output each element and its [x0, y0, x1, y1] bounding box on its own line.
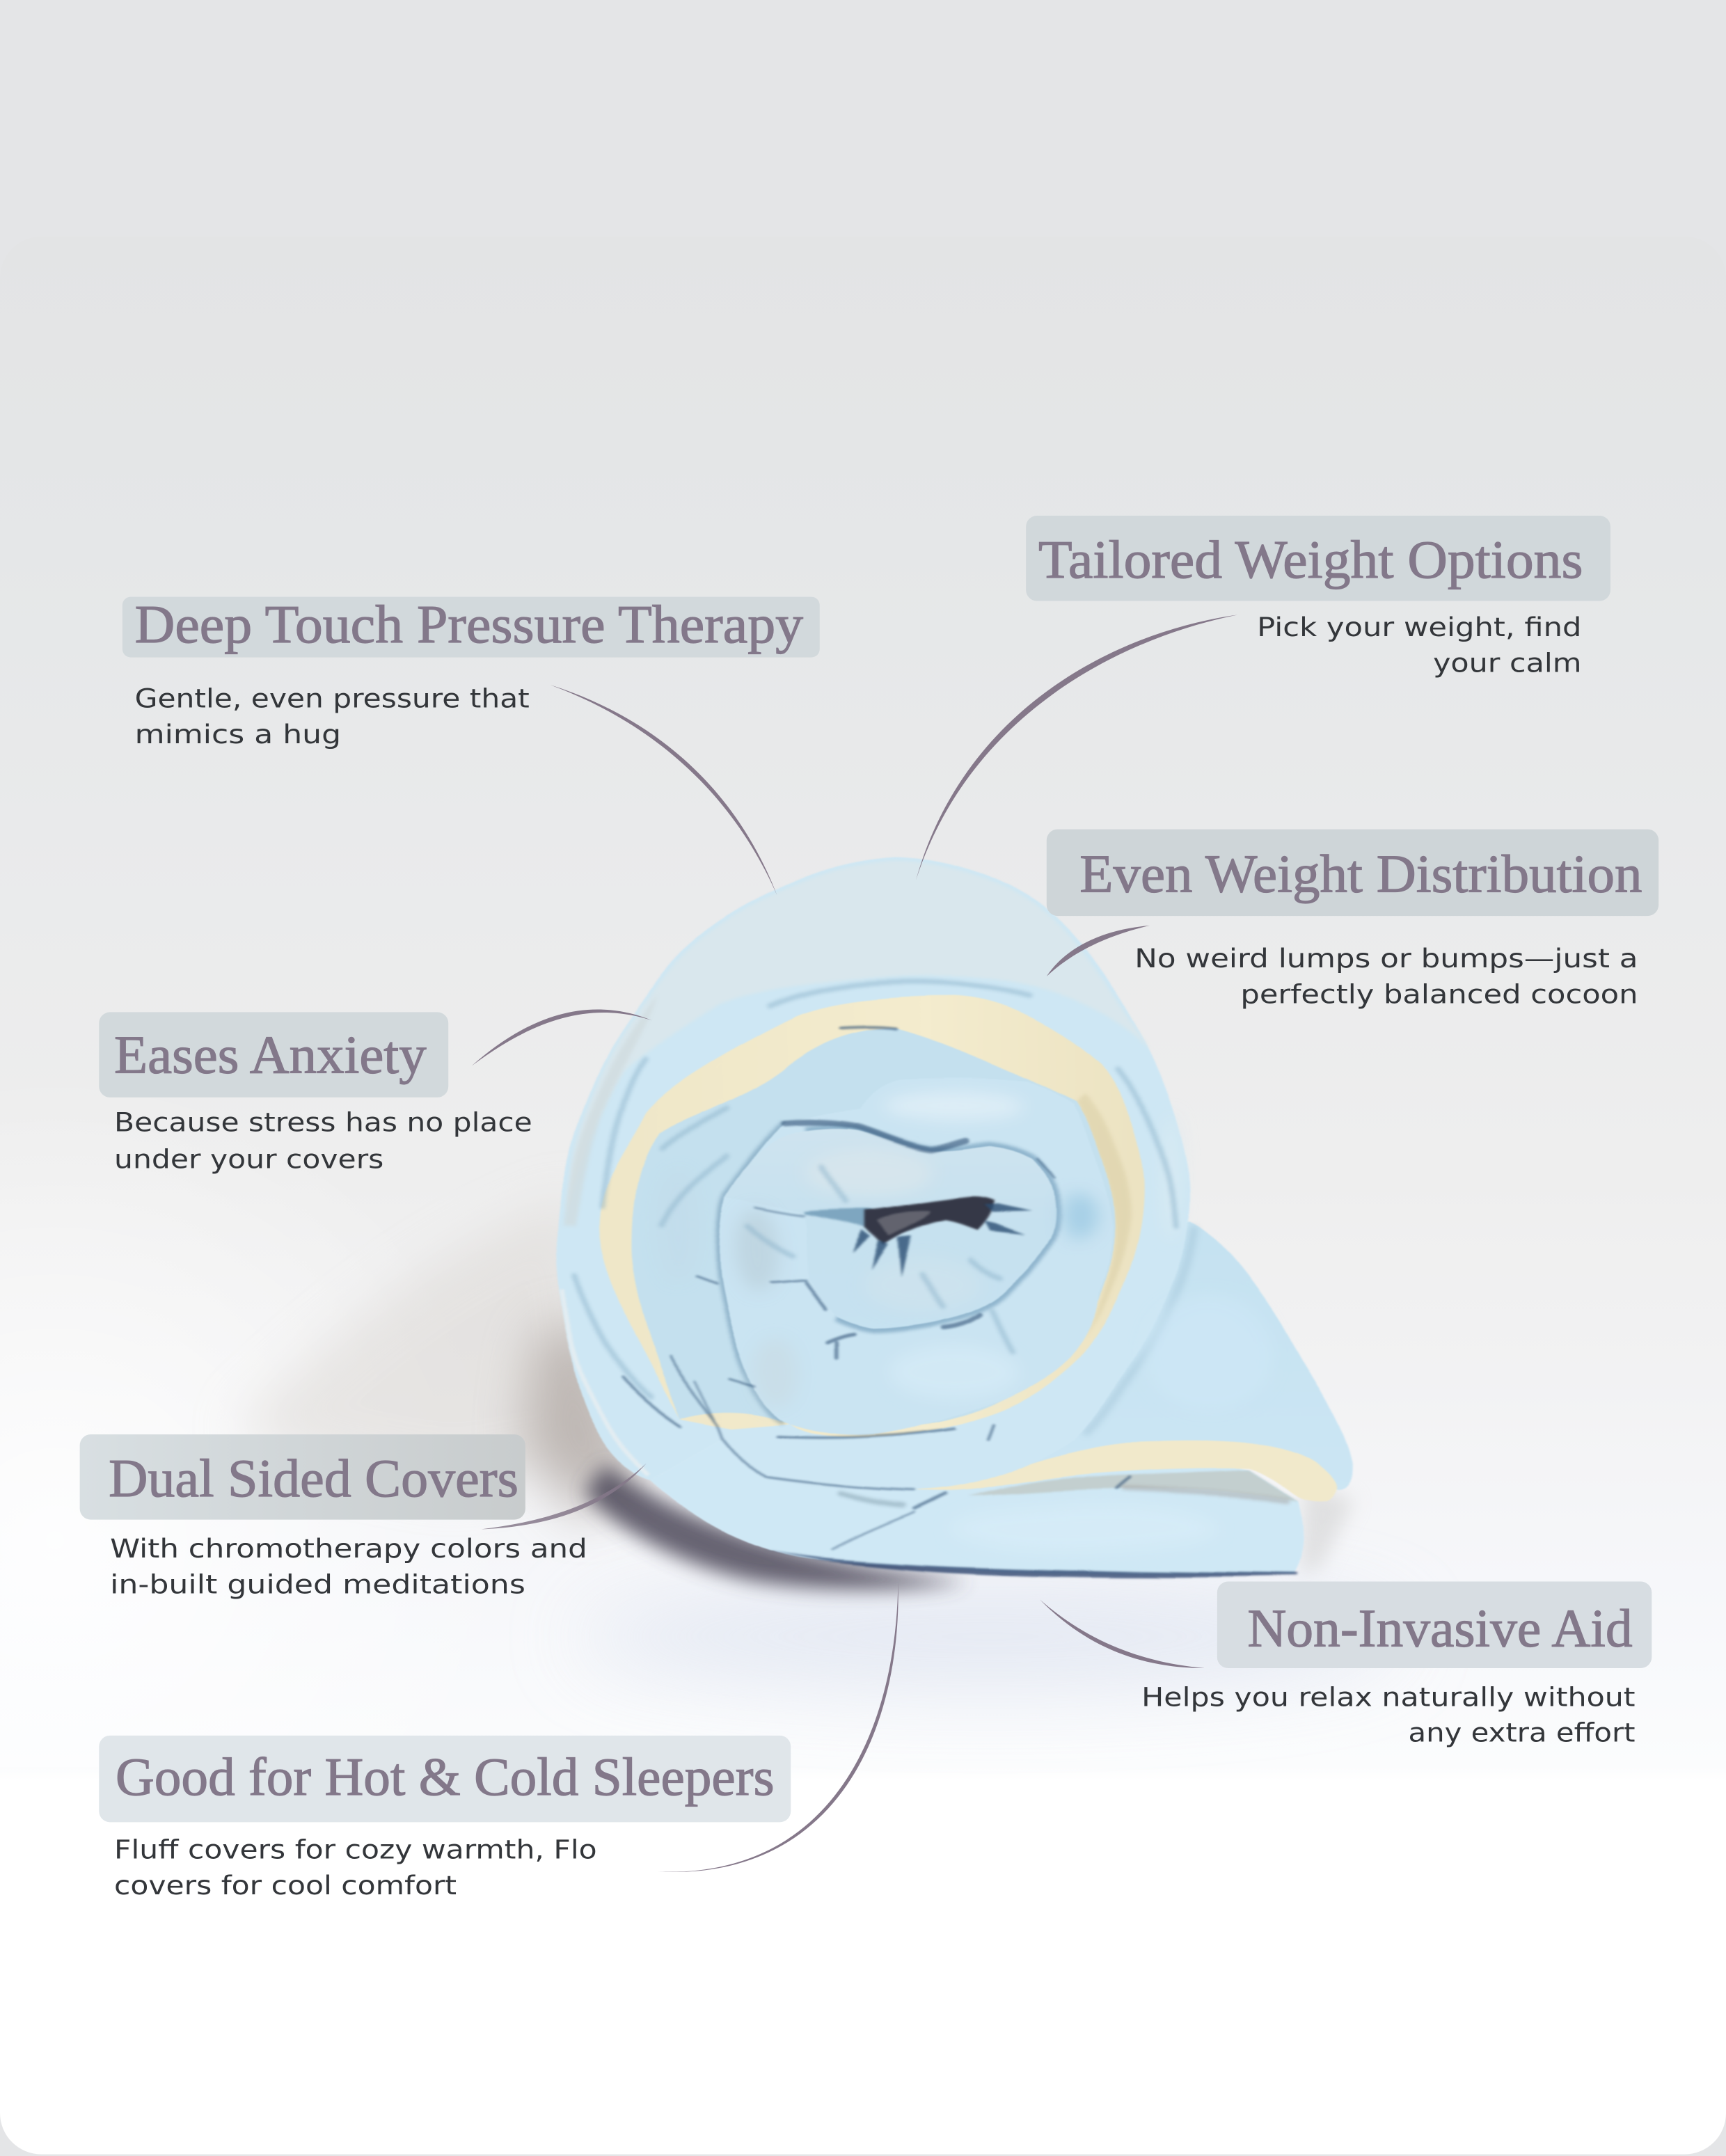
callout: Even Weight Distribution [1047, 830, 1658, 1010]
cream lining under flap [915, 1440, 1337, 1501]
blanket flap [976, 1221, 1353, 1490]
grey underside strip [969, 1470, 1299, 1501]
shadow around inner coil [805, 1129, 1055, 1329]
heading: Dual Sided Covers [80, 1434, 525, 1520]
text: Tailored Weight Options description [1257, 612, 1582, 678]
blanket shadows [0, 1072, 1403, 1767]
blanket roll outer wrap [556, 857, 1191, 1491]
text: Dual Sided Covers description: With chromotherapy colors and [110, 1533, 587, 1564]
centre hole shade [805, 1209, 873, 1228]
bottom edge of blanket [759, 1548, 1297, 1578]
inner coil [725, 1129, 1055, 1329]
shadow of second coil [720, 1123, 784, 1422]
bottom layer of blanket [649, 1438, 1304, 1575]
callout: Tailored Weight Options [916, 516, 1610, 880]
pale top of the roll [564, 861, 1150, 1216]
arrow: Dual Sided Covers [482, 1464, 647, 1529]
text: Dual Sided Covers description: in-built guided meditations [110, 1569, 525, 1599]
shaded inner cream [1076, 1094, 1130, 1338]
arrow: Even Weight Distribution [1047, 926, 1150, 976]
heading: Non-Invasive Aid [1217, 1582, 1652, 1668]
text: Deep Touch Pressure Therapy description: Gentle, even pressure that [135, 683, 530, 714]
text: Dual Sided Covers description [110, 1533, 587, 1599]
text: Deep Touch Pressure Therapy description: mimics a hug [135, 719, 341, 750]
heading: Eases Anxiety: Eases Anxiety [114, 1024, 427, 1084]
heading: Good for Hot & Cold Sleepers: Good for Hot & Cold Sleepers [116, 1747, 775, 1807]
arrow: Non-Invasive Aid [1040, 1599, 1205, 1668]
text: Eases Anxiety description: under your covers [114, 1144, 383, 1175]
heading: Tailored Weight Options [1026, 516, 1610, 601]
shadow of roll on flap [1084, 1226, 1196, 1434]
sharp fabric creases [622, 1027, 1128, 1550]
arrow: Tailored Weight Options [916, 615, 1237, 880]
rolled blanket illustration [556, 857, 1353, 1578]
cream spiral band [600, 997, 1144, 1437]
hole detail [878, 1211, 930, 1237]
text: Non-Invasive Aid description [1141, 1681, 1636, 1748]
text: Even Weight Distribution description: No weird lumps or bumps—just a [1134, 943, 1638, 974]
soft blurred folds [576, 982, 1288, 1506]
text: Tailored Weight Options description: your calm [1433, 647, 1582, 678]
text: Deep Touch Pressure Therapy description [135, 683, 530, 750]
text: Eases Anxiety description: Because stress has no place [114, 1107, 532, 1137]
arrow: Good for Hot & Cold Sleepers [658, 1582, 898, 1872]
callout: Non-Invasive Aid [1040, 1582, 1652, 1748]
callout: Eases Anxiety [99, 1009, 652, 1175]
grey left side of the roll [562, 994, 656, 1226]
text: Good for Hot & Cold Sleepers description: Fluff covers for cozy warmth, Flo [114, 1834, 597, 1865]
text: Good for Hot & Cold Sleepers description: covers for cool comfort [114, 1870, 457, 1901]
heading: Deep Touch Pressure Therapy: Deep Touch Pressure Therapy [135, 594, 804, 654]
arrow: Deep Touch Pressure Therapy [550, 685, 777, 895]
text: Eases Anxiety description [114, 1107, 532, 1175]
third coil inside cream [632, 1028, 1114, 1431]
text: Even Weight Distribution description: perfectly balanced cocoon [1240, 979, 1638, 1010]
text: Even Weight Distribution description [1134, 943, 1638, 1010]
heading: Eases Anxiety [99, 1012, 448, 1097]
text: Non-Invasive Aid description: any extra effort [1409, 1718, 1636, 1748]
centre hole [866, 1196, 995, 1246]
dark spikes around hole [853, 1204, 1031, 1277]
callout: Good for Hot & Cold Sleepers [99, 1582, 898, 1901]
shading and highlights on fabric [659, 1091, 1274, 1553]
heading: Even Weight Distribution [1047, 830, 1658, 916]
pale rim of the outer wrap [562, 1290, 648, 1475]
text: Good for Hot & Cold Sleepers description [114, 1834, 597, 1901]
heading: Non-Invasive Aid: Non-Invasive Aid [1247, 1598, 1633, 1658]
callout: Dual Sided Covers [80, 1434, 647, 1599]
heading: Good for Hot & Cold Sleepers [99, 1736, 791, 1822]
heading: Dual Sided Covers: Dual Sided Covers [109, 1448, 518, 1508]
heading: Tailored Weight Options: Tailored Weight Options [1038, 530, 1583, 589]
second coil [720, 1077, 1112, 1434]
text: Tailored Weight Options description: Pick your weight, find [1257, 612, 1582, 642]
callout: Deep Touch Pressure Therapy [122, 594, 820, 895]
text: Non-Invasive Aid description: Helps you relax naturally without [1141, 1681, 1636, 1712]
arrow: Eases Anxiety [472, 1009, 652, 1065]
heading: Even Weight Distribution: Even Weight Distribution [1079, 843, 1642, 903]
